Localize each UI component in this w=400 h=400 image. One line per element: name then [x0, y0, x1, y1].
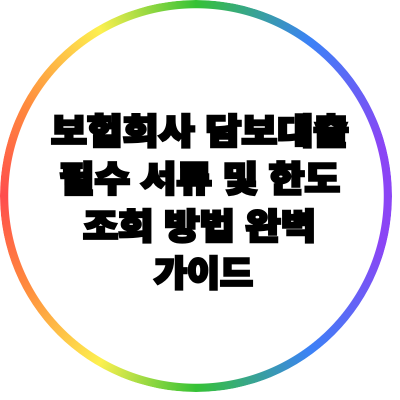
title: 조회 방법 완벽	[83, 208, 316, 247]
title: 가이드	[154, 255, 253, 294]
title: 보험회사 담보대출	[51, 113, 349, 152]
title: 필수 서류 및 한도	[59, 160, 340, 200]
